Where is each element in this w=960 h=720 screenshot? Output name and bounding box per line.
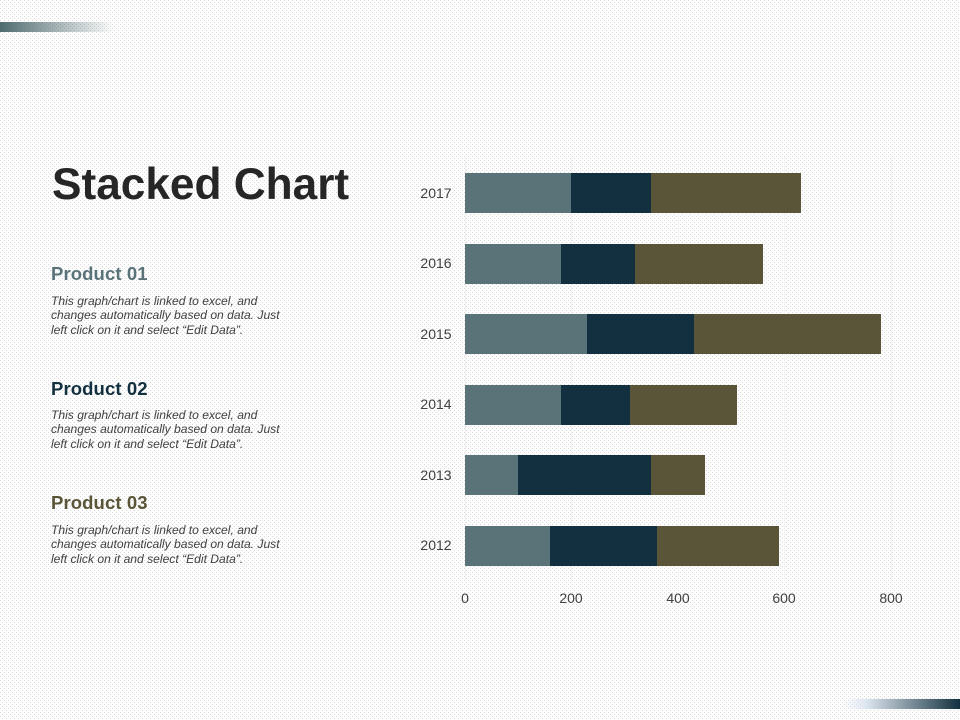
- bar: 2017: [465, 173, 801, 213]
- y axis labels: 2015: [420, 326, 452, 342]
- title: Stacked Chart: [52, 160, 349, 209]
- y axis labels: 2016: [420, 255, 452, 271]
- y axis labels: 2012: [420, 537, 452, 553]
- bar: 2015: [465, 314, 881, 354]
- x axis labels: 400: [666, 590, 690, 606]
- bar: 2013: [465, 455, 705, 495]
- bottom right gradient accent bar: [843, 699, 960, 709]
- text: product 03 description: left click on it and select “Edit Data”.: [51, 552, 243, 566]
- heading: product 01: Product 01: [51, 263, 148, 284]
- heading: product 02: Product 02: [51, 378, 148, 399]
- y axis labels: [420, 185, 452, 553]
- y axis labels: 2017: [420, 185, 452, 201]
- text: product 01 description: [51, 294, 280, 337]
- heading: product 03: Product 03: [51, 492, 148, 513]
- text: product 02 description: [51, 408, 280, 451]
- y axis labels: 2013: [420, 467, 452, 483]
- bar: 2012: [465, 526, 779, 566]
- text: product 02 description: changes automatically based on data. Just: [51, 422, 280, 436]
- text: product 03 description: [51, 523, 280, 566]
- x axis labels: 800: [879, 590, 903, 606]
- text: product 02 description: This graph/chart is linked to excel, and: [51, 408, 257, 422]
- text: product 02 description: left click on it and select “Edit Data”.: [51, 437, 243, 451]
- bar: 2014: [465, 385, 737, 425]
- bar: 2016: [465, 244, 763, 284]
- text: product 03 description: This graph/chart is linked to excel, and: [51, 523, 257, 537]
- text: product 01 description: left click on it and select “Edit Data”.: [51, 323, 243, 337]
- text: product 03 description: changes automatically based on data. Just: [51, 537, 280, 551]
- x axis labels: 200: [559, 590, 583, 606]
- top left gradient accent bar: [0, 22, 114, 32]
- x axis labels: [461, 590, 903, 606]
- text: product 01 description: changes automatically based on data. Just: [51, 308, 280, 322]
- text: product 01 description: This graph/chart is linked to excel, and: [51, 294, 257, 308]
- x axis labels: 600: [772, 590, 796, 606]
- y axis labels: 2014: [420, 396, 452, 412]
- x axis labels: 0: [461, 590, 469, 606]
